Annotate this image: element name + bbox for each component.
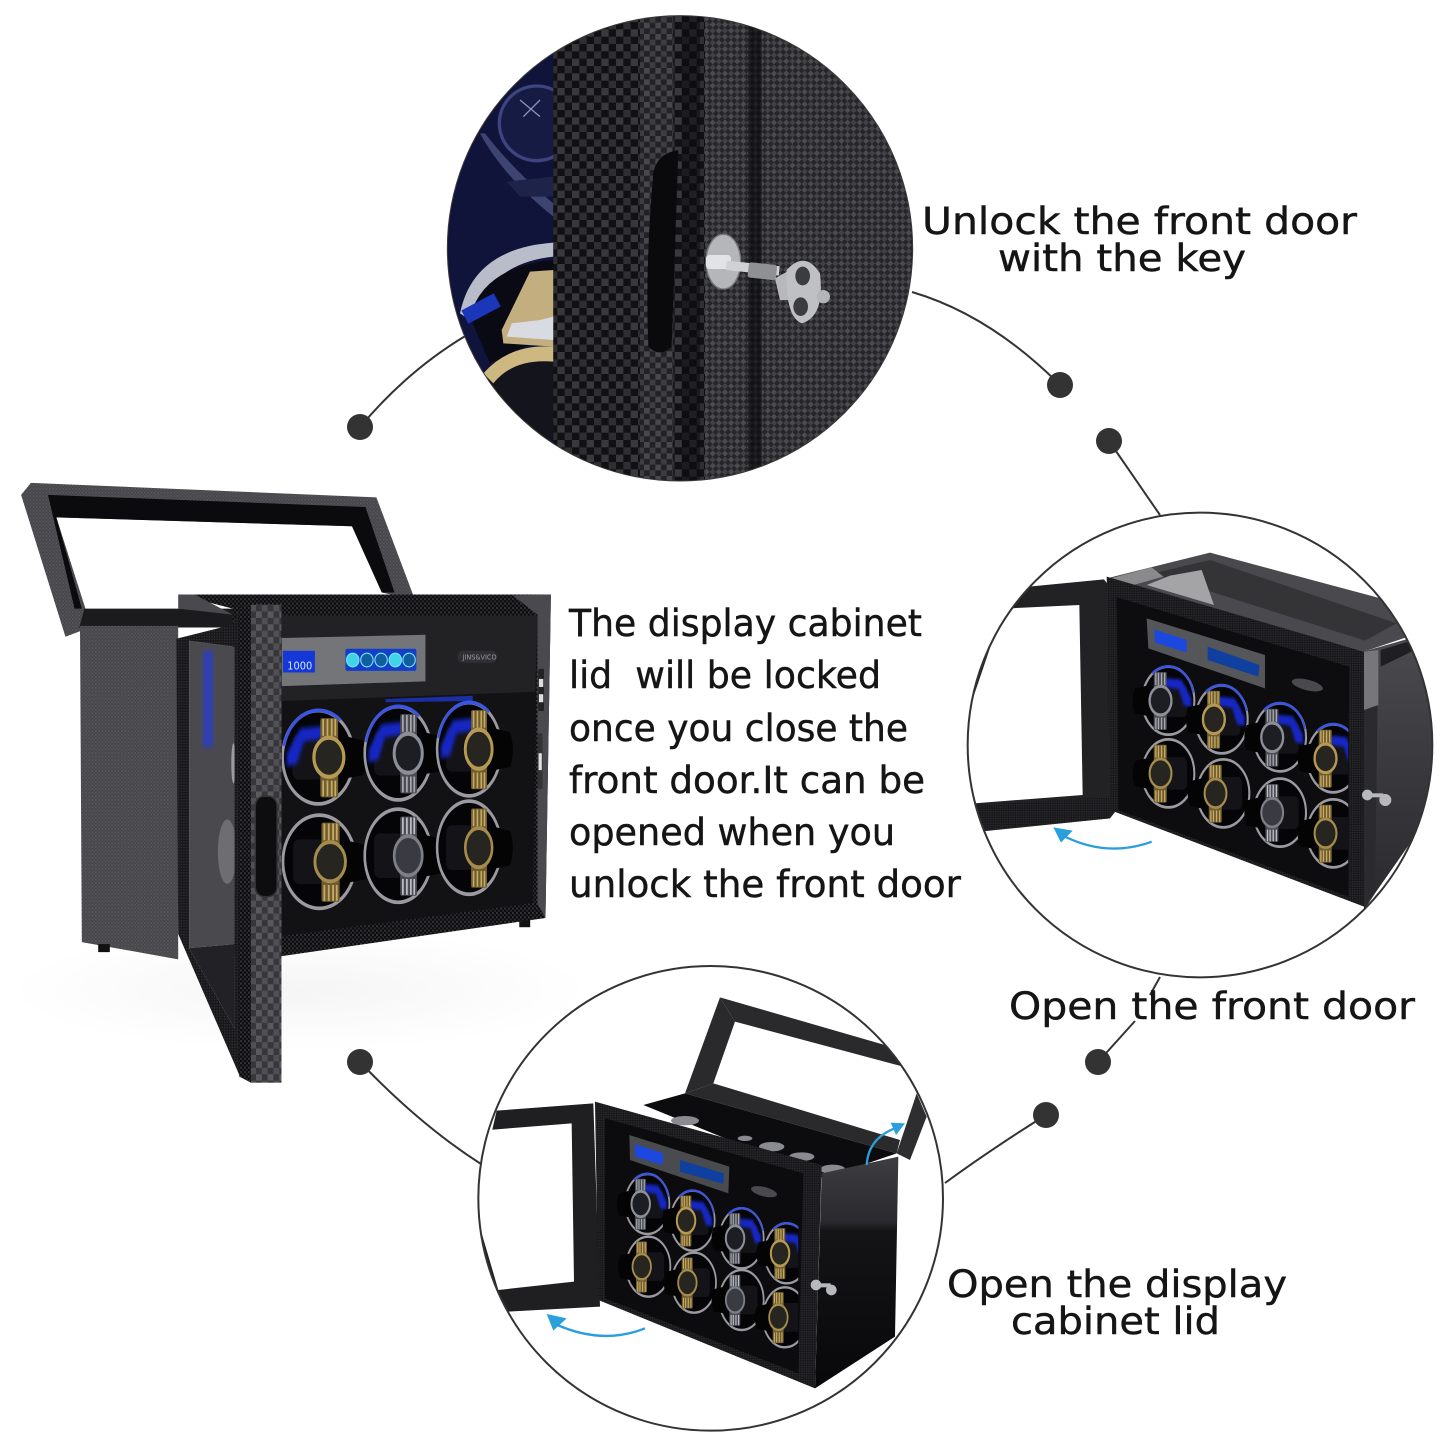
side trim stripes bbox=[1380, 642, 1412, 666]
cabinet top below lid bbox=[79, 609, 240, 627]
front carbon frame bbox=[178, 595, 551, 956]
connector: bottom circle left dot bbox=[347, 1049, 481, 1164]
key in lock bbox=[1362, 790, 1391, 806]
touch panel bbox=[680, 1160, 724, 1184]
opened lid bbox=[21, 483, 415, 637]
door handle recess bbox=[255, 796, 277, 897]
brand logo bbox=[1292, 678, 1323, 692]
control band bbox=[282, 615, 537, 701]
black interior bbox=[1117, 597, 1349, 897]
brand logo bbox=[751, 1186, 777, 1198]
open door frame bbox=[176, 605, 251, 1083]
watches in top view bbox=[671, 1116, 845, 1174]
cabinet side panel bbox=[80, 626, 178, 959]
panel: main cabinet with lid and door open bbox=[21, 483, 551, 1083]
door edge dark strip bbox=[239, 605, 252, 1083]
raised lid: top, left and bottom rails bbox=[685, 997, 903, 1153]
panel: open lid circle bbox=[470, 966, 943, 1431]
text block: lid locking description: unlock the front door bbox=[569, 863, 962, 906]
heading: open the display cabinet lid: Open the display bbox=[947, 1263, 1287, 1306]
open door glass bbox=[189, 641, 237, 1028]
touch panel bbox=[345, 649, 416, 671]
text block: lid locking description bbox=[568, 602, 962, 906]
silver control plate bbox=[1147, 618, 1265, 688]
brand logo: JINS&VICO bbox=[462, 653, 497, 662]
heading: unlock the front door: Unlock the front door bbox=[922, 200, 1358, 243]
raised lid: side rail bbox=[897, 1093, 927, 1160]
key bbox=[706, 234, 830, 323]
open door bbox=[470, 1103, 600, 1312]
blue light strip bbox=[385, 696, 473, 702]
heading: open the front door: Open the front door bbox=[1009, 985, 1416, 1028]
watch winders: eight cradles bbox=[617, 1174, 809, 1347]
lower watch with gold bracelet bbox=[460, 243, 553, 440]
watch winders: eight cradles bbox=[1133, 666, 1359, 867]
cabinet top with glass lid bbox=[1107, 553, 1408, 652]
heading: open the display cabinet lid: cabinet lid bbox=[1011, 1300, 1220, 1343]
feet bbox=[98, 920, 530, 952]
LCD screen: 1000 bbox=[287, 660, 312, 673]
floor shadow under main cabinet bbox=[10, 930, 590, 1050]
LCD screen bbox=[1154, 629, 1187, 653]
cabinet front frame bbox=[595, 1102, 822, 1388]
heading: unlock the front door bbox=[922, 200, 1358, 280]
panel: key close-up circle bbox=[440, 0, 922, 500]
black front interior bbox=[282, 615, 537, 936]
touch panel bbox=[1208, 647, 1259, 677]
carbon fibre strips bbox=[553, 0, 922, 500]
silver control plate bbox=[282, 635, 425, 686]
connector: bottom circle right dot bbox=[945, 1102, 1059, 1183]
watch winders: six cradles bbox=[283, 702, 513, 908]
connector: right circle upper dot bbox=[1096, 428, 1160, 515]
grey corners of frame bbox=[178, 595, 551, 918]
cabinet front frame bbox=[1107, 577, 1364, 907]
cabinet right side bbox=[1363, 632, 1433, 893]
blue interior behind door bbox=[448, 54, 554, 443]
connector: top circle right dot bbox=[912, 292, 1073, 398]
cabinet interior seen through top bbox=[643, 1093, 897, 1178]
LCD screen bbox=[635, 1144, 663, 1165]
silver corner strip bbox=[1364, 706, 1378, 908]
text block: lid locking description: opened when you bbox=[569, 811, 895, 854]
black interior bbox=[605, 1118, 803, 1373]
door edge with carbon face bbox=[251, 605, 281, 1083]
door arrow bbox=[547, 1314, 645, 1336]
brand logo bbox=[457, 651, 497, 663]
key in lock bbox=[811, 1280, 837, 1295]
door arrow bbox=[1053, 827, 1152, 849]
heading: unlock the front door: with the key bbox=[998, 237, 1246, 280]
connector: right circle lower dot bbox=[1085, 977, 1160, 1075]
panel: open front door circle bbox=[960, 513, 1433, 977]
right-edge lock hardware bbox=[537, 669, 544, 789]
text block: lid locking description: lid will be locked bbox=[569, 654, 881, 697]
text block: lid locking description: once you close the bbox=[569, 707, 908, 750]
text block: lid locking description: The display cabinet bbox=[568, 602, 922, 645]
LCD screen bbox=[283, 651, 315, 673]
silver control plate bbox=[629, 1135, 729, 1193]
door slot bbox=[647, 150, 678, 352]
connector: top circle left dot bbox=[347, 335, 467, 440]
lid arrow bbox=[867, 1123, 905, 1165]
text block: lid locking description: front door.It can be bbox=[569, 759, 925, 802]
upper watch bbox=[480, 84, 554, 216]
cabinet right side bbox=[815, 1157, 898, 1388]
heading: open the display cabinet lid bbox=[947, 1263, 1287, 1343]
open door bbox=[960, 579, 1117, 832]
